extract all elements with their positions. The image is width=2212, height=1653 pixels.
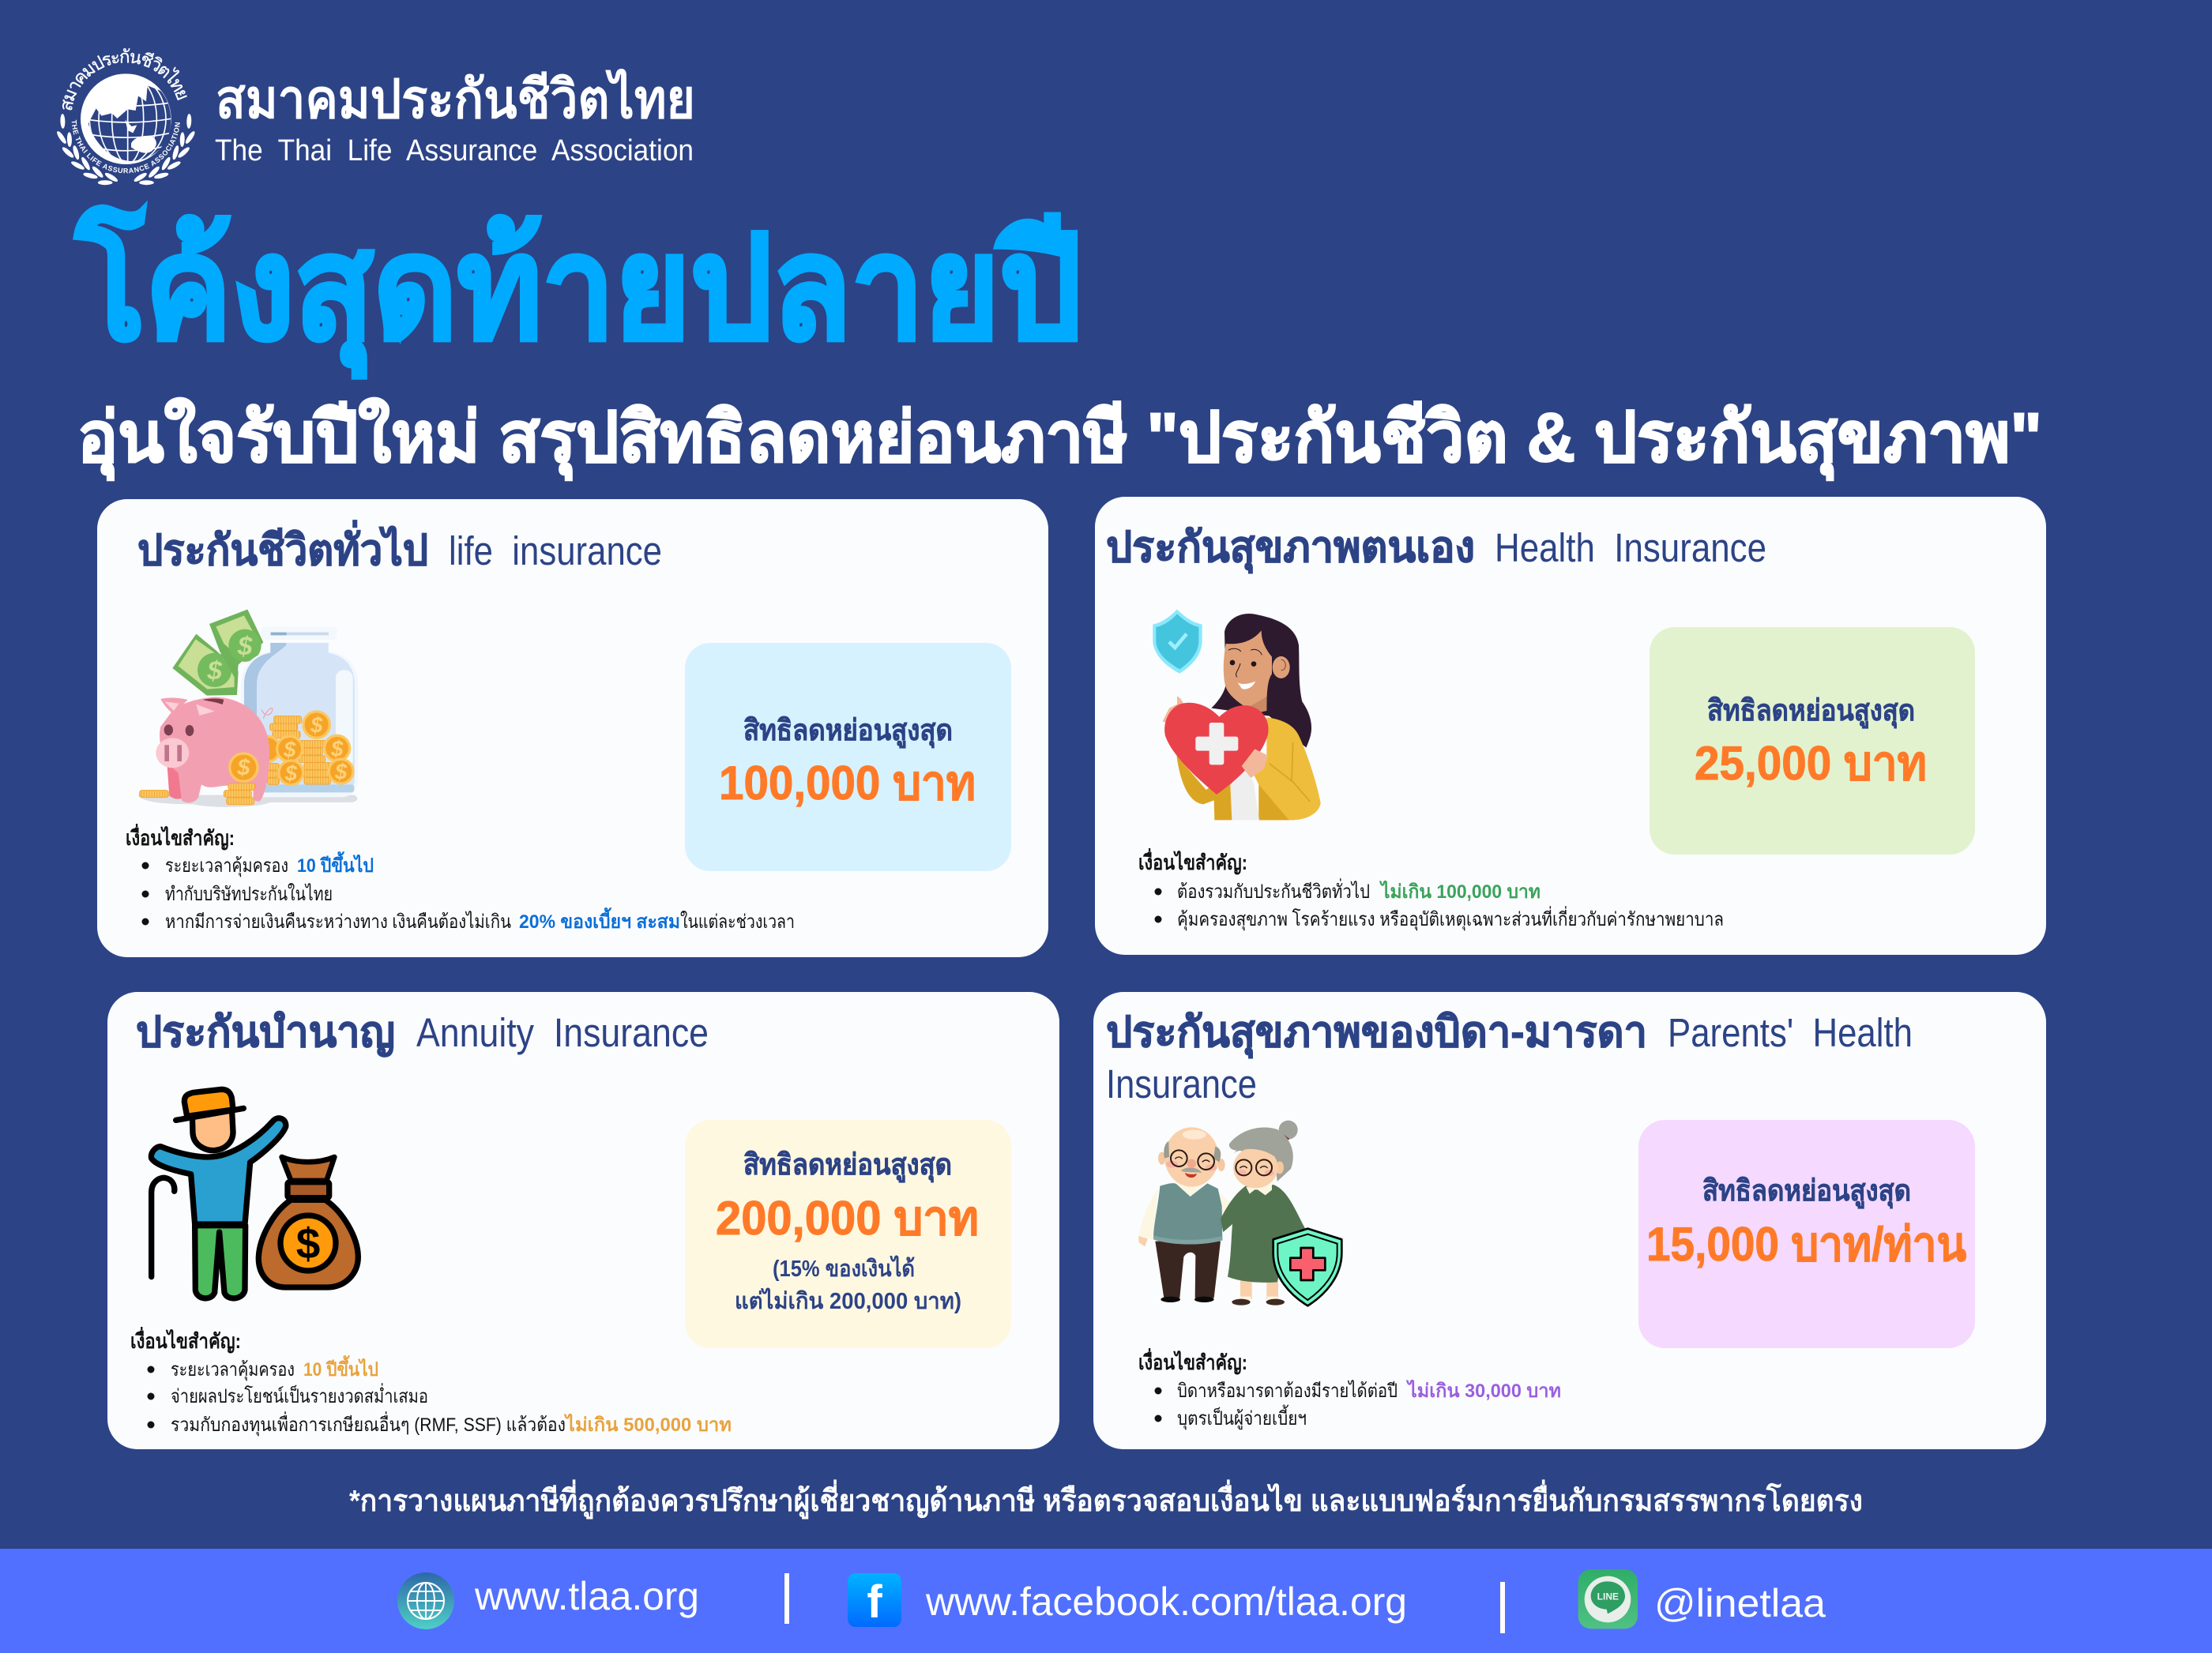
association name English: The Thai Life Assurance Association bbox=[215, 134, 694, 167]
line id: @linetlaa bbox=[1654, 1581, 1826, 1625]
heading: parents' health insurance: Insurance bbox=[1106, 1061, 1257, 1106]
icon: piggy bank, coin jar and banknotes: $ bbox=[284, 761, 298, 785]
conditions list: หากมีการจ่ายเงินคืนระหว่างทาง เงินคืนต้องไม่เกิน bbox=[165, 911, 511, 933]
icon: woman holding heart with medical cross and shield bbox=[1153, 610, 1321, 820]
callout: max deduction 100,000 baht: สิทธิลดหย่อนสูงสุด bbox=[743, 714, 953, 749]
conditions list: เงื่อนไขสำคัญ: bbox=[126, 823, 235, 851]
divider bbox=[784, 1573, 789, 1624]
conditions list: ในแต่ละช่วงเวลา bbox=[680, 911, 795, 933]
icon: globe bbox=[397, 1572, 454, 1629]
callout: max deduction 200,000 baht: สิทธิลดหย่อนสูงสุด bbox=[743, 1148, 952, 1183]
callout: max deduction 100,000 baht: 100,000 บาท bbox=[719, 757, 976, 810]
conditions list: จ่ายผลประโยชน์เป็นรายงวดสม่ำเสมอ bbox=[171, 1383, 428, 1407]
conditions list: ไม่เกิน 30,000 บาท bbox=[1405, 1379, 1561, 1402]
website link: www.tlaa.org bbox=[474, 1574, 699, 1618]
logo: Thai Life Assurance Association emblem bbox=[57, 48, 194, 185]
heading: life insurance: ประกันชีวิตทั่วไป bbox=[137, 520, 428, 574]
icon: piggy bank, coin jar and banknotes: $ bbox=[206, 657, 222, 686]
logo arc text: THE THAI LIFE ASSURANCE ASSOCIATION bbox=[71, 120, 180, 174]
heading: life insurance: life insurance bbox=[449, 528, 662, 573]
logo arc text: สมาคมประกันชีวิตไทย bbox=[62, 48, 187, 111]
icon: piggy bank, coin jar and banknotes: $ bbox=[330, 736, 344, 761]
callout: max deduction 15,000 baht per person bbox=[1638, 1120, 1975, 1348]
callout: max deduction 200,000 baht: 200,000 บาท bbox=[716, 1192, 979, 1245]
subtitle: อุ่นใจรับปีใหม่ สรุปสิทธิลดหย่อนภาษี "ประกันชีวิต & ประกันสุขภาพ" bbox=[77, 397, 2042, 481]
icon: piggy bank, coin jar and banknotes: $ bbox=[237, 632, 253, 661]
title: โค้งสุดท้ายปลายปี bbox=[74, 205, 1082, 378]
heading: annuity insurance: Annuity Insurance bbox=[416, 1010, 709, 1055]
conditions list: 10 ปีขึ้นไป bbox=[303, 1354, 378, 1381]
conditions list: บิดาหรือมารดาต้องมีรายได้ต่อปี bbox=[1177, 1380, 1398, 1402]
callout: max deduction 200,000 baht: แต่ไม่เกิน 200,000 บาท) bbox=[735, 1287, 961, 1314]
conditions list: บุตรเป็นผู้จ่ายเบี้ยฯ bbox=[1177, 1404, 1307, 1430]
panel: health insurance bbox=[1095, 497, 2046, 955]
icon: piggy bank, coin jar and banknotes bbox=[138, 610, 358, 807]
icon: facebook bbox=[848, 1573, 901, 1628]
callout: max deduction 200,000 baht: (15% ของเงินได้ bbox=[773, 1255, 915, 1282]
icon: elderly couple with medical shield bbox=[1138, 1121, 1341, 1305]
icon: piggy bank, coin jar and banknotes: $ bbox=[334, 760, 348, 784]
callout: max deduction 200,000 baht bbox=[685, 1120, 1011, 1348]
conditions list: ไม่เกิน 100,000 บาท bbox=[1379, 880, 1540, 903]
panel: life insurance bbox=[97, 499, 1048, 957]
icon: old man with cane and money bag bbox=[151, 1089, 358, 1298]
heading: health insurance: ประกันสุขภาพตนเอง bbox=[1106, 524, 1475, 574]
heading: health insurance: Health Insurance bbox=[1495, 525, 1766, 570]
conditions list: ทำกับบริษัทประกันในไทย bbox=[165, 883, 333, 905]
conditions list: เงื่อนไขสำคัญ: bbox=[1138, 847, 1247, 875]
dollar sign: $ bbox=[296, 1219, 320, 1268]
conditions list bbox=[130, 1326, 732, 1437]
panel: annuity insurance bbox=[107, 992, 1059, 1449]
conditions list: 20% ของเบี้ยฯ สะสม bbox=[519, 907, 680, 933]
conditions list: 10 ปีขึ้นไป bbox=[297, 851, 374, 877]
callout: max deduction 25,000 baht: 25,000 บาท bbox=[1695, 737, 1927, 790]
conditions list bbox=[1138, 847, 1724, 931]
conditions list bbox=[1138, 1347, 1561, 1430]
logo arc text bbox=[62, 48, 187, 174]
icon: piggy bank, coin jar and banknotes: $ bbox=[310, 713, 323, 738]
heading: life insurance bbox=[137, 520, 662, 574]
conditions list bbox=[126, 823, 795, 933]
conditions list: ระยะเวลาคุ้มครอง bbox=[171, 1359, 295, 1381]
heading: health insurance bbox=[1106, 524, 1766, 574]
callout: max deduction 25,000 baht: สิทธิลดหย่อนสูงสุด bbox=[1707, 694, 1915, 729]
association name Thai: สมาคมประกันชีวิตไทย bbox=[216, 68, 695, 130]
icon: facebook: f bbox=[867, 1576, 882, 1628]
heading: parents' health insurance bbox=[1106, 1009, 1913, 1106]
icon: LINE bbox=[1578, 1569, 1638, 1629]
conditions list: รวมกับกองทุนเพื่อการเกษียณอื่นๆ (RMF, SSF) แล้วต้อง bbox=[171, 1411, 566, 1437]
footnote: *การวางแผนภาษีที่ถูกต้องควรปรึกษาผู้เชี่ยวชาญด้านภาษี หรือตรวจสอบเงื่อนไข และแบบฟอร์มการยื่นกับกรมสรรพากรโดยตรง bbox=[349, 1479, 1863, 1520]
callout: max deduction 25,000 baht bbox=[1650, 627, 1975, 855]
heading: parents' health insurance: ประกันสุขภาพของบิดา-มารดา bbox=[1106, 1009, 1647, 1059]
conditions list: เงื่อนไขสำคัญ: bbox=[130, 1326, 241, 1354]
icon: piggy bank, coin jar and banknotes: $ bbox=[283, 737, 296, 761]
conditions list: เงื่อนไขสำคัญ: bbox=[1138, 1347, 1247, 1375]
icon: LINE: LINE bbox=[1597, 1591, 1619, 1602]
callout: max deduction 15,000 baht per person: 15,000 บาท/ท่าน bbox=[1646, 1218, 1966, 1271]
conditions list: ไม่เกิน 500,000 บาท bbox=[563, 1413, 732, 1436]
facebook link: www.facebook.com/tlaa.org bbox=[925, 1580, 1407, 1624]
heading: parents' health insurance: Parents' Health bbox=[1668, 1010, 1913, 1055]
conditions list: ระยะเวลาคุ้มครอง bbox=[165, 855, 288, 877]
panel: parents' health insurance bbox=[1093, 992, 2046, 1449]
callout: max deduction 100,000 baht bbox=[685, 643, 1011, 871]
conditions list: คุ้มครองสุขภาพ โรคร้ายแรง หรืออุบัติเหตุเฉพาะส่วนที่เกี่ยวกับค่ารักษาพยาบาล bbox=[1177, 906, 1724, 931]
callout: max deduction 15,000 baht per person: สิทธิลดหย่อนสูงสุด bbox=[1702, 1174, 1911, 1209]
icon: piggy bank, coin jar and banknotes: $ bbox=[236, 756, 250, 781]
footer bar bbox=[0, 1549, 2212, 1653]
heading: annuity insurance bbox=[136, 1009, 709, 1057]
divider bbox=[1500, 1582, 1505, 1633]
heading: annuity insurance: ประกันบำนาญ bbox=[136, 1009, 395, 1057]
conditions list: ต้องรวมกับประกันชีวิตทั่วไป bbox=[1177, 878, 1370, 903]
